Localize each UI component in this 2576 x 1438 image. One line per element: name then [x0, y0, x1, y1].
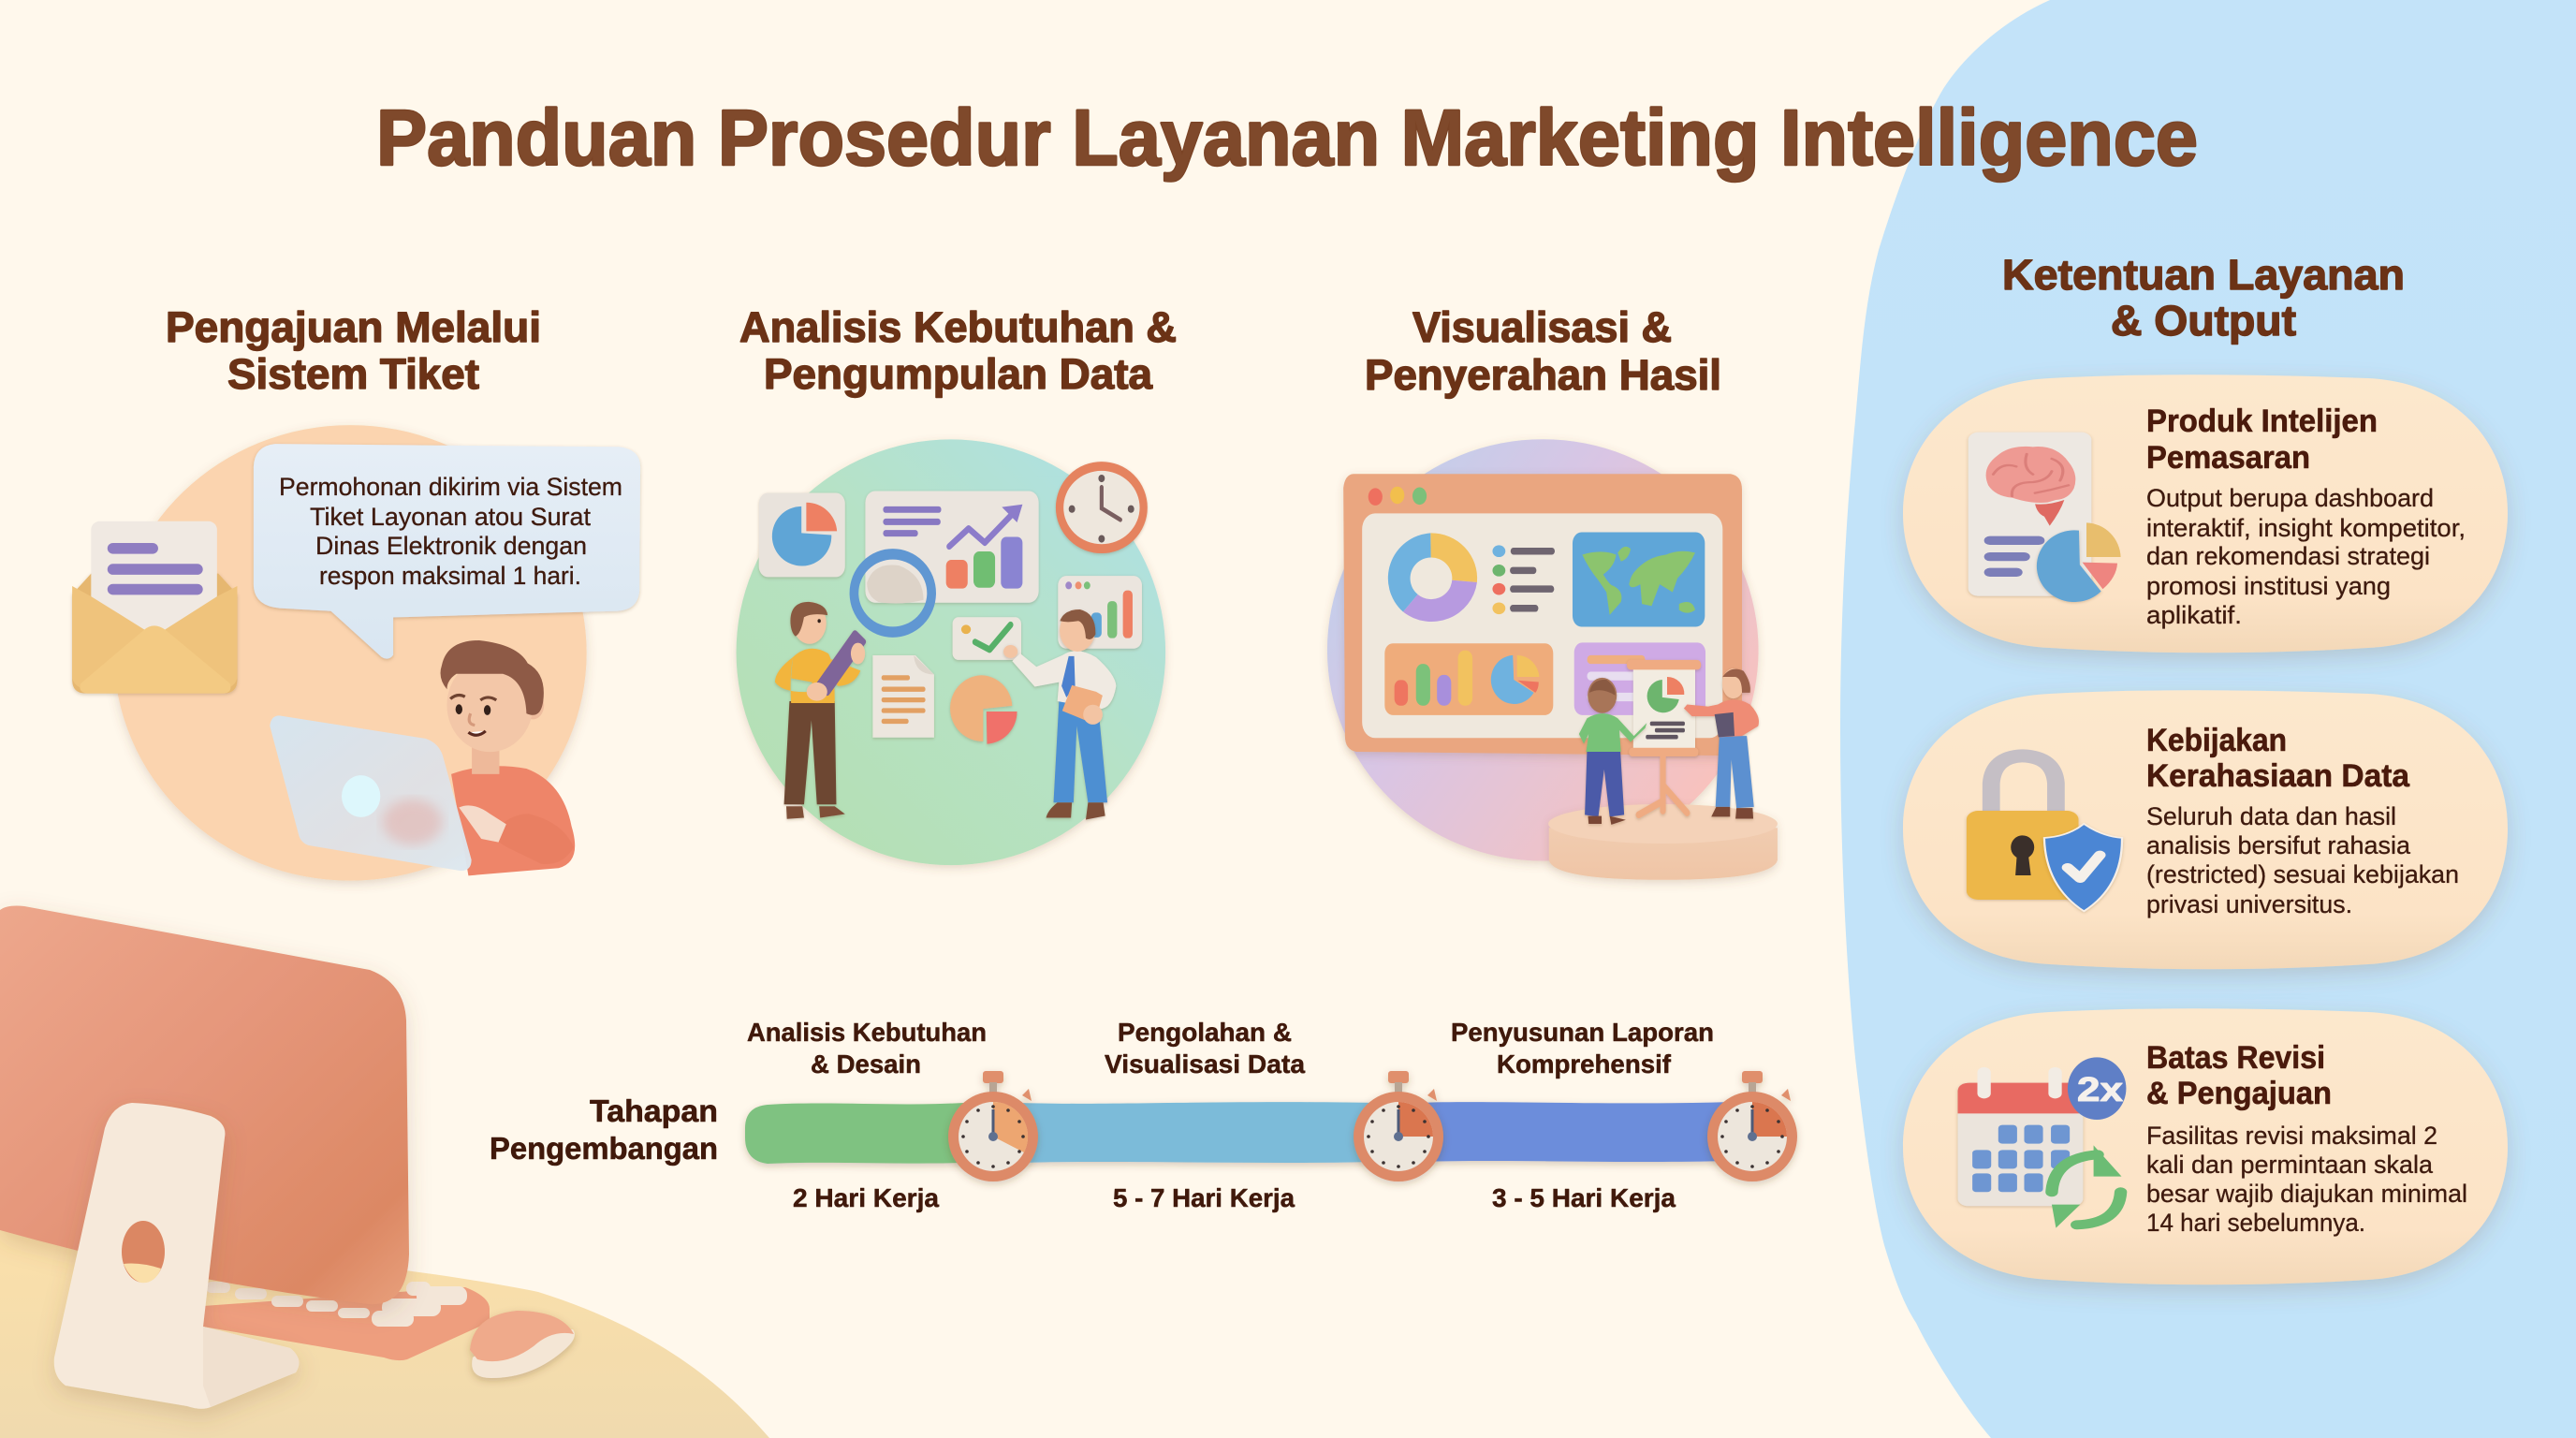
illustration: step 1 ticket submission: [72, 425, 640, 881]
icon: stopwatch 2: [1354, 1071, 1443, 1181]
phase labels: Komprehensif: [1497, 1049, 1672, 1078]
phase labels: Penyusunan Laporan: [1451, 1018, 1714, 1047]
card text: [2146, 1040, 2467, 1237]
card text: (restricted) sesuai kebijakan: [2146, 860, 2459, 888]
dashboard frame: [1343, 474, 1742, 756]
card text: Fasilitas revisi maksimal 2: [2146, 1122, 2437, 1150]
section heading: step 3: Visualisasi &: [1412, 303, 1672, 351]
green circle: [737, 439, 1165, 865]
card text: Pemasaran: [2146, 440, 2310, 476]
peach circle: [114, 425, 587, 881]
section heading: step 1: [166, 303, 541, 398]
card text: dan rekomendasi strategi: [2146, 542, 2430, 570]
card text: Seluruh data dan hasil: [2146, 802, 2396, 830]
card text: 14 hari sebelumnya.: [2146, 1209, 2365, 1237]
card: trend chart: [865, 492, 1039, 603]
phase labels: & Desain: [811, 1049, 921, 1078]
section heading: step 1: Sistem Tiket: [227, 350, 479, 398]
card text: besar wajib diajukan minimal: [2146, 1180, 2467, 1208]
icon: stopwatch 1: [948, 1071, 1038, 1181]
section heading: step 3: [1365, 303, 1721, 399]
bar: phase 1: [745, 1103, 964, 1164]
desk surface: [0, 1230, 769, 1438]
person: man seen from back: [1579, 678, 1647, 825]
timeline label: Tahapan: [590, 1093, 718, 1128]
card text: aplikatif.: [2146, 601, 2242, 629]
icon: padlock and shield: [1967, 756, 2122, 911]
card text: promosi institusi yang: [2146, 572, 2391, 600]
durations: 2 Hari Kerja: [793, 1183, 939, 1212]
section heading: step 3: Penyerahan Hasil: [1365, 351, 1721, 399]
card: pie chart: [759, 493, 845, 577]
panel: right blue background: [1840, 0, 2576, 1438]
card: check: [953, 617, 1021, 660]
phase labels: Analisis Kebutuhan: [747, 1018, 987, 1047]
purple panel: [1574, 642, 1705, 715]
card text: interaktif, insight kompetitor,: [2146, 514, 2466, 542]
icon: calendar with revision badge: [1958, 1057, 2126, 1228]
section heading: step 2: [739, 303, 1177, 398]
phase labels: [747, 1018, 1714, 1078]
illustration: step 2 data analysis: [737, 439, 1165, 865]
illustration: step 3 dashboard presentation: [1327, 439, 1778, 880]
podium: [1548, 804, 1778, 880]
monitor back: [0, 906, 409, 1304]
person right: [1003, 609, 1116, 820]
person with tablet: [270, 640, 575, 875]
person: woman presenter: [1684, 668, 1759, 819]
badge label: 2x: [2077, 1070, 2123, 1108]
card text: Batas Revisi: [2146, 1040, 2325, 1076]
card text: analisis bersifut rahasia: [2146, 831, 2411, 859]
legend: [1492, 545, 1555, 614]
icon: document: [872, 655, 934, 738]
illustration: desk with computer: [0, 906, 769, 1438]
gradient circle: [1327, 439, 1759, 861]
bubble text: [279, 473, 622, 590]
card text: Kebijakan: [2146, 723, 2287, 758]
durations: 3 - 5 Hari Kerja: [1492, 1183, 1676, 1212]
icon: envelope: [72, 521, 237, 694]
card text: & Pengajuan: [2146, 1076, 2332, 1111]
card text: privasi universitus.: [2146, 890, 2352, 918]
world map: [1573, 533, 1705, 627]
card: Produk Intelijen Pemasaran: [1903, 374, 2508, 653]
mouse: [470, 1311, 575, 1378]
section heading: step 2: Analisis Kebutuhan &: [739, 303, 1177, 351]
card text: Output berupa dashboard: [2146, 484, 2434, 512]
card: Batas Revisi & Pengajuan: [1903, 1008, 2508, 1284]
right panel heading: & Output: [2111, 297, 2296, 345]
donut chart: [1388, 533, 1477, 622]
phase labels: Pengolahan &: [1118, 1018, 1292, 1047]
right panel heading: Ketentuan Layanan: [2002, 251, 2405, 299]
title: Panduan Prosedur Layanan Marketing Intelligence: [376, 94, 2198, 182]
section heading: step 1: Pengajuan Melalui: [166, 303, 541, 351]
icon: orange pie: [950, 675, 1017, 744]
bar: phase 2: [1020, 1102, 1376, 1163]
card: browser bars: [1058, 576, 1142, 649]
card text: Kerahasiaan Data: [2146, 758, 2410, 794]
card text: Produk Intelijen: [2146, 404, 2378, 439]
bubble text: respon maksimal 1 hari.: [319, 562, 581, 590]
icon: stopwatch 3: [1707, 1071, 1797, 1181]
monitor stand: [54, 1103, 299, 1409]
durations: [793, 1183, 1676, 1212]
phase labels: Visualisasi Data: [1105, 1049, 1305, 1078]
right panel heading: [2002, 251, 2405, 345]
keyboard: [203, 1282, 490, 1360]
bubble text: Tiket Layonan atou Surat: [310, 503, 591, 531]
durations: 5 - 7 Hari Kerja: [1113, 1183, 1295, 1212]
icon: magnifier: [854, 554, 931, 632]
icon: clock: [1060, 466, 1144, 549]
speech bubble: [254, 444, 640, 659]
bubble text: Dinas Elektronik dengan: [315, 532, 587, 560]
person left: [775, 602, 867, 819]
timeline label: [490, 1093, 718, 1166]
card text: [2146, 723, 2459, 918]
presentation easel: [1627, 660, 1701, 814]
card text: kali dan permintaan skala: [2146, 1151, 2434, 1179]
timeline label: Pengembangan: [490, 1131, 718, 1166]
card: Kebijakan Kerahasiaan Data: [1903, 690, 2508, 969]
icon: brain report: [1969, 433, 2121, 602]
bar: phase 3: [1413, 1102, 1732, 1162]
card text: [2146, 404, 2466, 629]
bubble text: Permohonan dikirim via Sistem: [279, 473, 622, 501]
bar and pie panel: [1384, 643, 1553, 715]
section heading: step 2: Pengumpulan Data: [764, 350, 1153, 398]
timeline: [745, 1018, 1797, 1212]
